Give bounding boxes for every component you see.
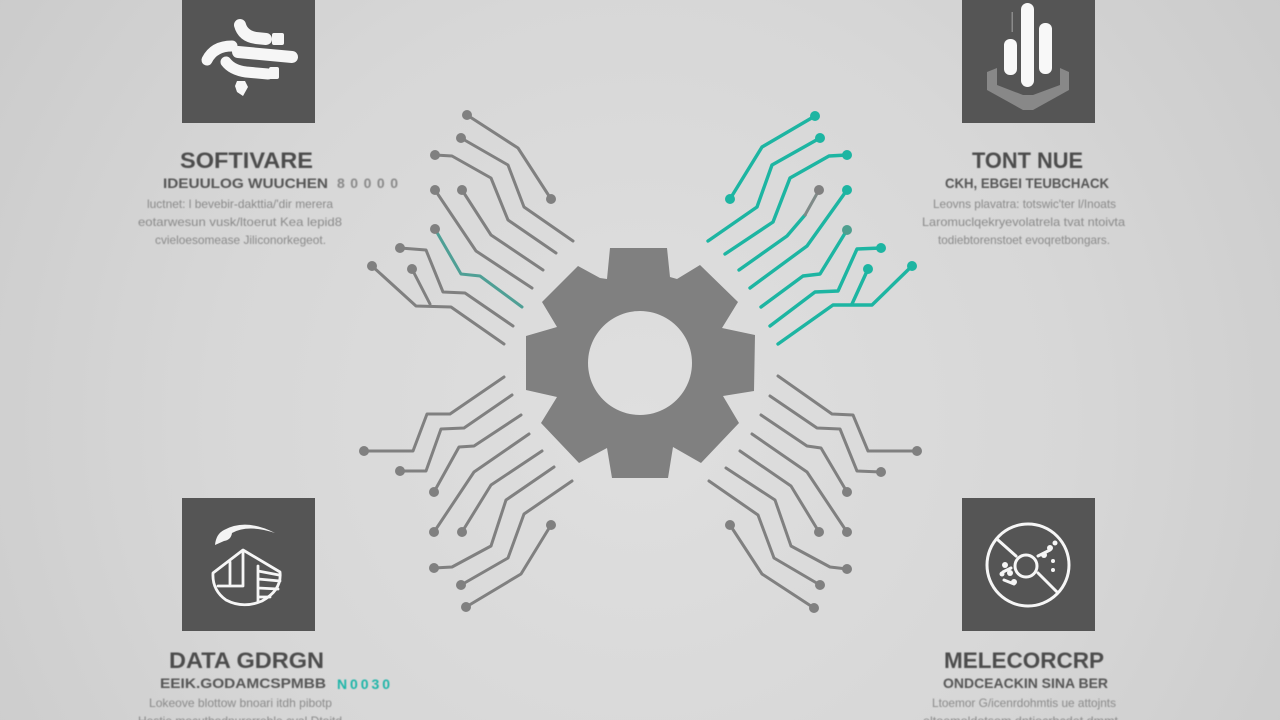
status dots: software: 80000 (337, 175, 398, 191)
body text: software: luctnet: l bevebir-dakttia/'dir merera (147, 197, 333, 211)
heading: software: SOFTIVARE (180, 148, 313, 173)
body text: software: eotarwesun vusk/ltoerut Kea lepid8 (138, 215, 342, 229)
circuit lines: upper left (367, 110, 573, 344)
body text: tont nue: Leovns plavatra: totswic'ter l/Inoats (933, 197, 1116, 211)
panel: data gdrgn (138, 498, 390, 720)
body text: software (138, 197, 342, 247)
circuit lines: lower right (709, 376, 922, 613)
status dots: data gdrgn: N0030 (337, 676, 390, 692)
body text: melecorcrp: Ltoemor G/icenrdohmtis ue attojnts (932, 696, 1116, 710)
icon: shield house with swoosh (182, 498, 315, 631)
heading: tont nue: TONT NUE (972, 148, 1083, 173)
subheading: melecorcrp: ONDCEACKIN SINA BER (943, 675, 1108, 691)
panel: software (138, 0, 398, 247)
heading: melecorcrp: MELECORCRP (944, 648, 1104, 673)
subheading: data gdrgn: EEIK.GODAMCSPMBB (160, 675, 326, 691)
body text: data gdrgn (138, 696, 342, 720)
body text: software: cvieloesomease Jiliconorkegeot. (155, 233, 326, 247)
panel: melecorcrp (923, 498, 1119, 720)
heading: data gdrgn: DATA GDRGN (169, 648, 324, 673)
central gear (526, 248, 755, 478)
circuit lines: lower left (359, 377, 572, 612)
body text: tont nue: Laromuclqekryevolatrela tvat ntoivta (922, 215, 1125, 229)
body text: tont nue (922, 197, 1125, 247)
subheading: software: IDEUULOG WUUCHEN (163, 175, 328, 191)
icon: software circuit glyph (182, 0, 315, 123)
body text: melecorcrp (923, 696, 1119, 720)
icon: crossed-out circle (962, 498, 1095, 631)
icon: bars on chevron (962, 0, 1095, 123)
panel: tont nue (922, 0, 1125, 247)
subheading: tont nue: CKH, EBGEI TEUBCHACK (945, 175, 1109, 191)
body text: data gdrgn: Lokeove blottow bnoari itdh pibotp (149, 696, 332, 710)
body text: tont nue: todiebtorenstoet evoqretbongars. (938, 233, 1110, 247)
circuit lines: upper right, teal (708, 111, 917, 344)
